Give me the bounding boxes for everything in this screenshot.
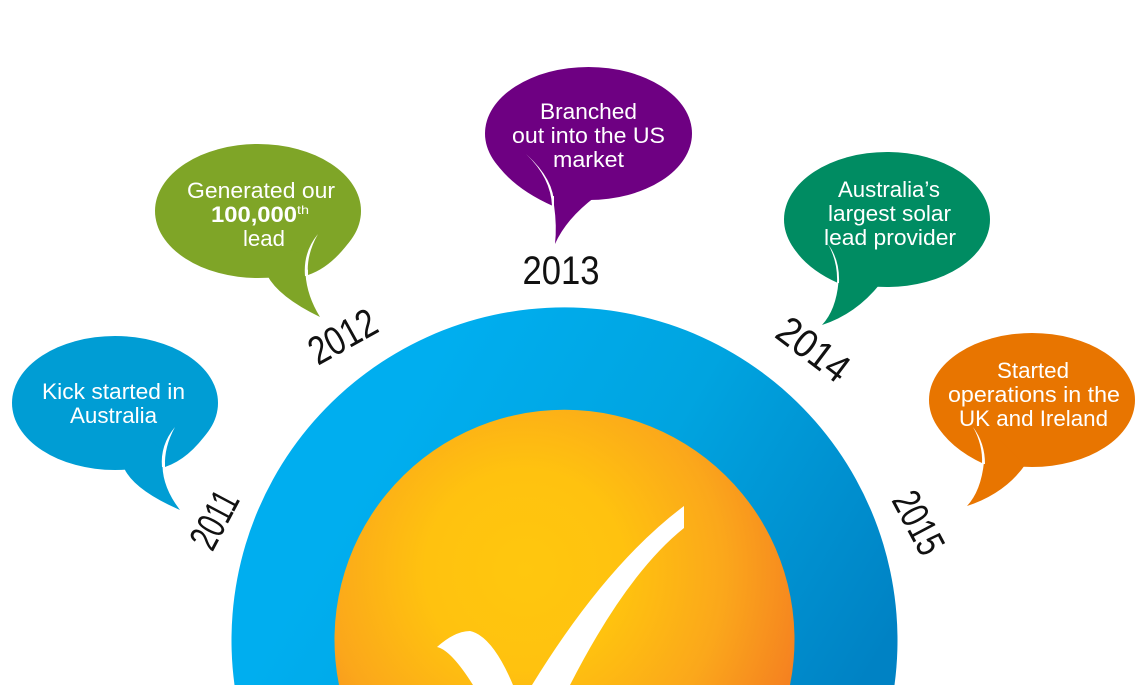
bubble 2013 bbox=[485, 67, 692, 244]
bubble 2015 bbox=[929, 333, 1135, 506]
bubble 2014: lead provider bbox=[824, 225, 956, 250]
bubble 2012: 100,000 bbox=[211, 202, 297, 227]
year label 2015: 2015 bbox=[883, 484, 953, 562]
year label 2013: 2013 bbox=[522, 249, 600, 293]
bubble 2014: largest solar bbox=[828, 201, 951, 226]
year label 2014: 2014 bbox=[768, 308, 858, 392]
bubble 2012: Generated our bbox=[187, 178, 335, 203]
bubble 2012: lead bbox=[243, 226, 285, 251]
bubble 2013: out into the US bbox=[512, 123, 665, 148]
bubble 2011: Kick started in bbox=[42, 379, 185, 404]
bubble 2013: market bbox=[553, 147, 624, 172]
inner orange sun bbox=[334, 410, 794, 685]
year label 2011: 2011 bbox=[181, 483, 249, 557]
bubble 2015: Started bbox=[997, 358, 1069, 383]
icon: white check mark bbox=[437, 506, 684, 685]
outer blue semicircle bbox=[232, 307, 897, 685]
year label 2012: 2012 bbox=[301, 300, 385, 374]
bubble 2015: operations in the bbox=[948, 382, 1120, 407]
bubble 2012: th bbox=[297, 203, 309, 217]
bubble 2015: UK and Ireland bbox=[959, 406, 1108, 431]
bubble 2013: Branched bbox=[540, 99, 637, 124]
bubble 2014 bbox=[784, 152, 990, 325]
bubble 2011 bbox=[12, 336, 218, 510]
bubble 2012 bbox=[155, 144, 361, 317]
bubble 2014: Australia’s bbox=[838, 177, 940, 202]
bubble 2011: Australia bbox=[70, 403, 158, 428]
